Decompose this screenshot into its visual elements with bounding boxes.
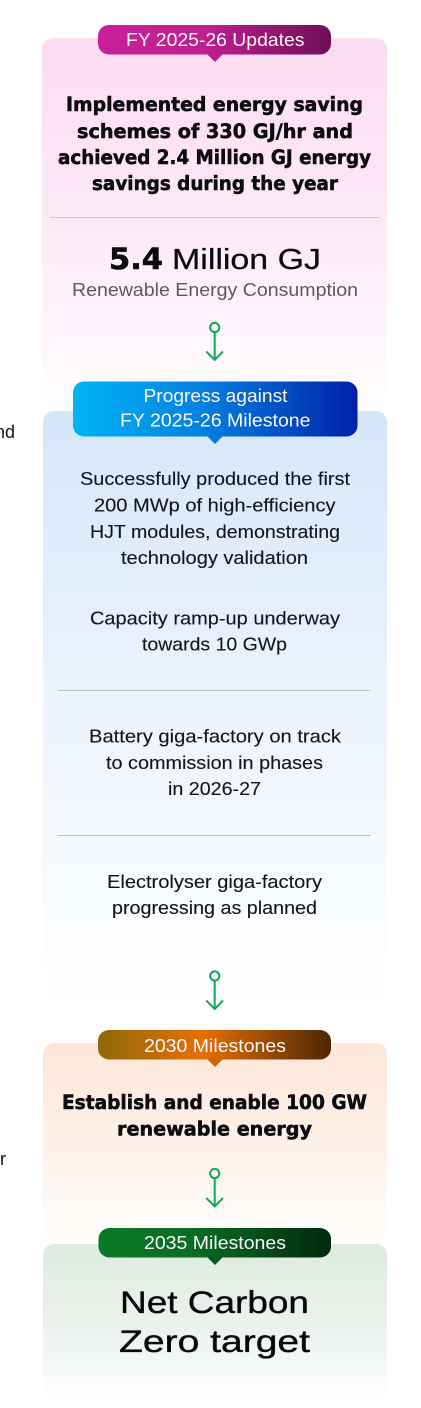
pill: 2035 Milestones xyxy=(98,1228,331,1265)
heading: energy saving schemes xyxy=(58,93,371,195)
heading: 100 GW renewable energy xyxy=(62,1091,367,1140)
pill: 2030 Milestones xyxy=(98,1030,331,1067)
panel background: progress xyxy=(43,411,387,1011)
text: battery giga-factory xyxy=(89,726,342,799)
stat: 5.4 Million GJ: Million GJ xyxy=(172,244,321,276)
text: capacity ramp-up: Capacity ramp-up underway xyxy=(90,608,341,628)
heading: energy saving schemes: achieved 2.4 Million GJ energy xyxy=(58,146,371,169)
panel: 2030 milestones xyxy=(43,1043,387,1248)
heading: energy saving schemes: savings during the year xyxy=(92,172,338,195)
heading: energy saving schemes: schemes of 330 GJ/hr and xyxy=(77,120,353,143)
panel: 2035 milestones xyxy=(43,1244,387,1404)
pill: 2035 Milestones: 2035 Milestones xyxy=(144,1233,286,1253)
arrow: progress to 2030 xyxy=(206,971,223,1009)
panel background: updates xyxy=(42,38,387,418)
heading: net carbon zero target: Net Carbon xyxy=(120,1284,309,1320)
text: battery giga-factory: to commission in phases xyxy=(106,752,323,773)
stat: 5.4 Million GJ: 5.4 xyxy=(109,242,163,276)
text: HJT modules: technology validation xyxy=(121,547,308,568)
pill: 2030 Milestones: 2030 Milestones xyxy=(144,1036,286,1056)
panel: progress against milestone xyxy=(43,411,387,1011)
panel background: 2035 xyxy=(43,1244,387,1404)
arrow: updates to progress xyxy=(206,323,223,360)
stat: 5.4 Million GJ xyxy=(109,242,321,276)
pill: Progress against FY 2025-26 Milestone: Progress against xyxy=(144,386,288,406)
heading: 100 GW renewable energy: renewable energy xyxy=(117,1118,312,1140)
panel: FY 2025-26 updates xyxy=(42,38,387,418)
heading: 100 GW renewable energy: Establish and enable 100 GW xyxy=(62,1091,367,1114)
heading: net carbon zero target: Zero target xyxy=(119,1323,310,1359)
pill: FY 2025-26 Updates xyxy=(98,25,331,62)
text: HJT modules: 200 MWp of high-efficiency xyxy=(94,494,336,516)
pill: Progress against FY 2025-26 Milestone xyxy=(73,382,358,444)
text: electrolyser giga-factory: Electrolyser giga-factory xyxy=(107,871,323,892)
pill: FY 2025-26 Updates: FY 2025-26 Updates xyxy=(126,30,304,50)
stat label: Renewable Energy Consumption xyxy=(72,279,358,300)
text: electrolyser giga-factory xyxy=(107,871,323,918)
panel background: 2030 xyxy=(43,1043,387,1248)
text: battery giga-factory: Battery giga-factory on track xyxy=(89,726,342,746)
clipped text at left edge xyxy=(0,422,15,1169)
text: capacity ramp-up: towards 10 GWp xyxy=(142,634,287,654)
text: HJT modules: Successfully produced the first xyxy=(80,468,350,489)
text: capacity ramp-up xyxy=(90,608,341,654)
heading: energy saving schemes: Implemented energy saving xyxy=(66,93,363,116)
text: HJT modules: HJT modules, demonstrating xyxy=(90,521,340,542)
text: HJT modules xyxy=(80,468,350,568)
text: battery giga-factory: in 2026-27 xyxy=(168,778,261,799)
clipped text at left edge: r xyxy=(0,1149,6,1169)
text: electrolyser giga-factory: progressing as planned xyxy=(112,897,317,918)
arrow: 2030 to 2035 xyxy=(206,1169,223,1206)
heading: net carbon zero target xyxy=(119,1284,310,1359)
pill: Progress against FY 2025-26 Milestone: FY 2025-26 Milestone xyxy=(120,410,310,430)
